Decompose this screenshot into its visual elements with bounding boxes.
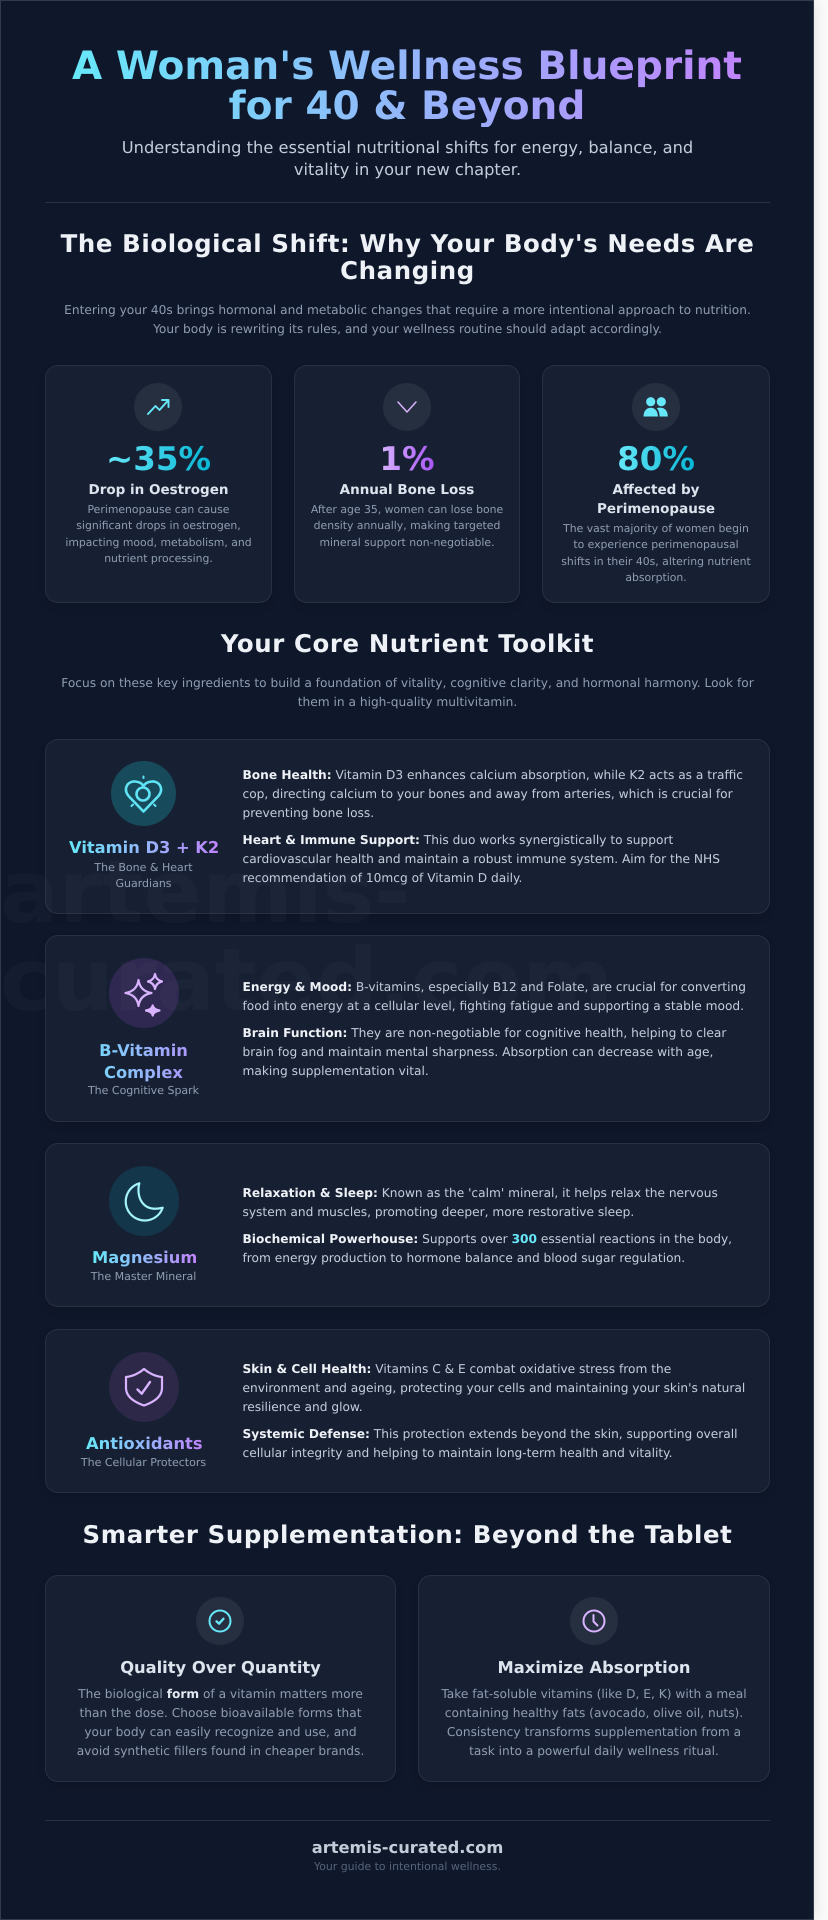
watermark: artemis- [0,841,411,943]
benefit: heart and immune [242,833,720,885]
heading: biological shift: The Biological Shift: Why Your Body's Needs Are [61,229,754,258]
benefit: heart and immune: Heart & Immune Support: This duo works synergistically to support [242,833,673,847]
benefit: bone health: preventing bone loss. [242,806,374,820]
subtitle: vitality in your new chapter. [294,160,521,179]
icon: clock [570,1597,618,1645]
heading: core nutrient toolkit: Your Core Nutrient Toolkit [221,629,594,658]
benefit: brain function [242,1026,726,1078]
heading: biological shift [60,229,754,285]
card description: containing healthy fats (avocado, olive oil, nuts). [445,1706,743,1720]
stat description: After age 35, women can lose bone [311,503,503,516]
benefit: bone health [242,768,743,820]
nutrient tagline: The Cellular Protectors [81,1456,206,1469]
stat description [561,522,751,584]
title [72,47,742,127]
card description: avoid synthetic fillers found in cheaper brands. [77,1744,364,1758]
nutrient name: Magnesium [92,1248,197,1267]
icon: trending up [134,383,182,431]
nutrient name: Antioxidants [86,1434,203,1453]
stat description: Perimenopause can cause [88,503,229,516]
stat label: Affected by [612,482,699,498]
icon: people [632,383,680,431]
benefit: biochemical powerhouse [242,1232,732,1265]
benefit: skin and cell health [242,1362,745,1414]
benefit: systemic defense: Systemic Defense: This protection extends beyond the skin, supporting overall [242,1427,738,1441]
nutrient name: B-Vitamin [99,1040,188,1060]
benefit: biochemical powerhouse: from energy production to hormone balance and blood sugar regulation. [242,1251,685,1265]
card description: task into a powerful daily wellness ritual. [469,1744,719,1758]
card description: Consistency transforms supplementation from a [447,1724,741,1738]
benefit: heart and immune: recommendation of 10mcg of Vitamin D daily. [242,871,522,885]
card description: your body can easily recognize and use, and [84,1724,357,1738]
benefit: skin and cell health: resilience and glow. [242,1400,363,1414]
benefit: bone health: Bone Health: Vitamin D3 enhances calcium absorption, while K2 acts as a traffic [242,768,743,782]
benefit: energy and mood: Energy & Mood: B-vitamins, especially B12 and Folate, are crucial for converting [242,980,746,994]
nutrient tagline: The Bone & Heart [94,861,193,874]
benefit: systemic defense: cellular integrity and helping to maintain long-term health and vitality. [242,1446,673,1460]
panel: maximize absorption [418,1575,770,1782]
intro text: core nutrient toolkit [61,676,754,708]
stat number: 80% [617,440,695,478]
nutrient tagline: The Master Mineral [91,1270,196,1283]
stat description: impacting mood, metabolism, and [65,536,252,549]
card description [441,1686,747,1758]
stat number: ~35% [106,440,211,478]
card description: than the dose. Choose bioavailable forms that [80,1706,361,1720]
benefit: relaxation and sleep: system and muscles, promoting deeper, more restorative sleep. [242,1205,634,1219]
intro text: biological shift [64,303,751,336]
subtitle [122,138,693,179]
panel: magnesium [45,1143,770,1307]
stat description: The vast majority of women begin [563,522,749,535]
panel: quality over quantity [45,1575,396,1782]
stat description: density annually, making targeted [314,519,500,532]
stat description: to experience perimenopausal [573,538,739,551]
watermark: curated.com [0,929,613,1031]
subtitle: Understanding the essential nutritional shifts for energy, balance, and [122,138,693,157]
benefit: skin and cell health: environment and ageing, protecting your cells and maintaining your skin's natural [242,1381,745,1395]
panel: stat drop in oestrogen [45,365,272,603]
watermark [0,848,613,1024]
intro text: core nutrient toolkit: them in a high-quality multivitamin. [298,694,517,708]
card title: Quality Over Quantity [120,1658,321,1676]
stat description [65,503,252,565]
benefit: bone health: cop, directing calcium to your bones and away from arteries, which is crucial for [242,787,733,801]
benefit: heart and immune: cardiovascular health and maintain a robust immune system. Aim for the NHS [242,852,720,866]
stat description: shifts in their 40s, altering nutrient [561,555,751,568]
heading: biological shift: Changing [340,256,475,285]
card description [77,1686,364,1758]
icon: moon [108,1166,178,1236]
benefit: systemic defense [242,1427,738,1460]
card description: The biological form of a vitamin matters more [78,1686,363,1700]
nutrient tagline [94,861,193,890]
footer brand: artemis-curated.com [312,1838,503,1857]
card description: Take fat-soluble vitamins (like D, E, K) with a meal [441,1686,747,1700]
stat number: 1% [379,440,435,478]
panel: antioxidants [45,1329,770,1493]
nutrient tagline: The Cognitive Spark [88,1084,199,1097]
stat description: mineral support non-negotiable. [319,536,495,549]
benefit: skin and cell health: Skin & Cell Health: Vitamins C & E combat oxidative stress from the [242,1362,671,1376]
benefit: relaxation and sleep [242,1186,718,1219]
icon: check circle [196,1597,244,1645]
benefit: relaxation and sleep: Relaxation & Sleep: Known as the 'calm' mineral, it helps relax the nervous [242,1186,718,1200]
title: A Woman's Wellness Blueprint [72,44,742,89]
stat label [597,482,715,517]
nutrient name [69,1040,218,1084]
panel: stat annual bone loss [294,365,520,603]
stat label: Annual Bone Loss [340,482,474,498]
nutrient tagline: Guardians [115,877,172,890]
benefit: brain function: brain fog and maintain mental sharpness. Absorption can decrease with age, [242,1044,713,1058]
panel: stat affected by perimenopause [542,365,770,603]
title: for 40 & Beyond [229,84,585,129]
benefit: energy and mood [242,980,746,1013]
nutrient name: Vitamin D3 + K2 [69,838,219,857]
icon: heart [111,761,176,826]
panel: b-vitamin complex [45,935,770,1122]
stat description: absorption. [625,571,687,584]
icon: sparkles [108,958,178,1028]
stat label: Perimenopause [597,501,715,517]
panel: vitamin d3 + k2 [45,739,770,914]
stat description: nutrient processing. [104,552,213,565]
icon: chevron down [383,383,431,431]
footer tagline: Your guide to intentional wellness. [314,1860,501,1873]
stat label: Drop in Oestrogen [89,482,228,498]
benefit: brain function: making supplementation vital. [242,1064,429,1078]
benefit: biochemical powerhouse: Biochemical Powerhouse: Supports over 300 essential reactions in the body, [242,1232,732,1246]
benefit: brain function: Brain Function: They are non-negotiable for cognitive health, helping to clear [242,1026,726,1040]
benefit: energy and mood: food into energy at a cellular level, fighting fatigue and supporting a stable mood. [242,999,744,1013]
nutrient name: Complex [104,1062,183,1082]
intro text: biological shift: Your body is rewriting its rules, and your wellness routine should adapt accordingly. [153,322,662,336]
card title: Maximize Absorption [498,1658,690,1676]
stat description: significant drops in oestrogen, [76,519,241,532]
icon: shield [108,1352,178,1422]
intro text: core nutrient toolkit: Focus on these key ingredients to build a foundation of vitality, cognitive clarity, and hormonal harmony. Look for [61,676,754,690]
intro text: biological shift: Entering your 40s brings hormonal and metabolic changes that require a more intentional approach to nutrition. [64,303,751,317]
heading: smarter supplementation: Smarter Supplementation: Beyond the Tablet [83,1520,732,1548]
stat description [311,503,503,549]
